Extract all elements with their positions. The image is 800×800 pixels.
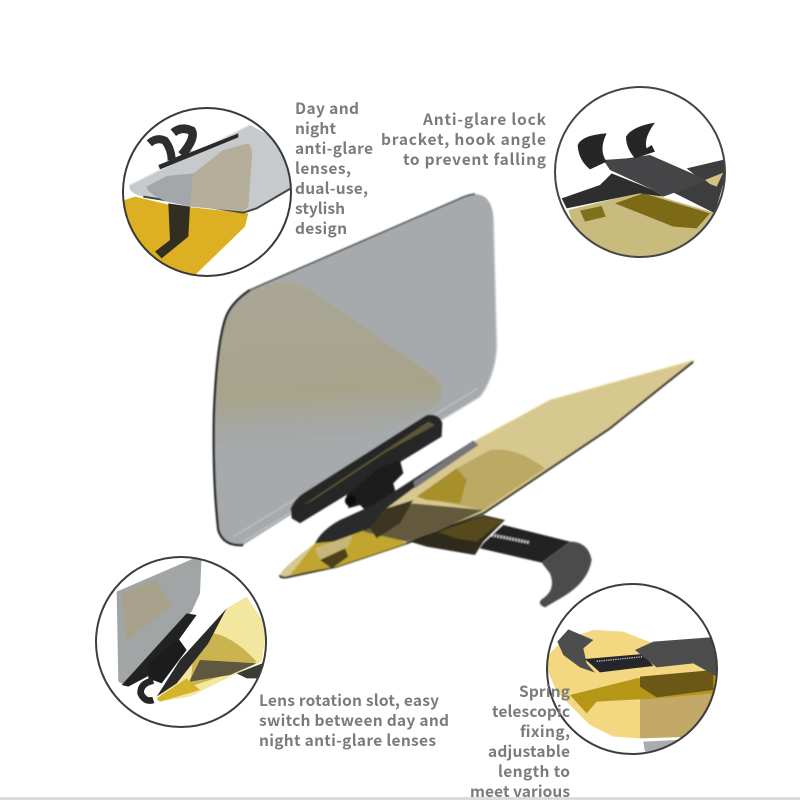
text: rotation slot: [259, 689, 449, 751]
text: rotation slot: Lens rotation slot, easy: [259, 689, 439, 711]
text: day and night lenses: Day and: [295, 97, 359, 119]
text: lock bracket: to prevent falling: [403, 148, 546, 170]
text: spring telescopic fixing: telescopic: [492, 700, 570, 722]
text: day and night lenses: night: [295, 117, 336, 139]
text: rotation slot: switch between day and: [259, 709, 449, 731]
circle detail: hook and lens top: [120, 125, 297, 277]
yellow night lens: [280, 360, 695, 578]
text: day and night lenses: [295, 97, 373, 239]
circle detail: telescopic spring: [543, 629, 720, 752]
text: spring telescopic fixing: fixing,: [520, 720, 570, 742]
text: lock bracket: bracket, hook angle: [381, 128, 546, 150]
main visor product: [214, 194, 695, 607]
circle outline: rotation slot: [96, 557, 266, 727]
text: day and night lenses: design: [295, 217, 347, 239]
text: day and night lenses: stylish: [295, 197, 345, 219]
text: day and night lenses: anti-glare: [295, 137, 373, 159]
text: spring telescopic fixing: adjustable: [488, 740, 570, 762]
text: lock bracket: Anti-glare lock: [422, 108, 547, 130]
text: day and night lenses: lenses,: [295, 157, 351, 179]
text: spring telescopic fixing: Spring: [519, 680, 570, 702]
text: spring telescopic fixing: [470, 680, 570, 800]
pivot bracket: [291, 415, 478, 543]
circle outline: telescopic spring: [547, 584, 717, 754]
text: day and night lenses: dual-use,: [295, 177, 368, 199]
circle outline: hook and lens top: [123, 108, 291, 276]
grey day lens: [214, 194, 497, 545]
text: spring telescopic fixing: length to: [498, 760, 570, 782]
telescopic arm and hook: [410, 515, 592, 607]
circle detail: lock bracket: [562, 123, 727, 260]
circle detail: rotation slot: [117, 555, 267, 702]
text: lock bracket: [381, 108, 547, 170]
text: rotation slot: night anti-glare lenses: [259, 729, 436, 751]
circle outline: lock bracket: [555, 87, 725, 257]
